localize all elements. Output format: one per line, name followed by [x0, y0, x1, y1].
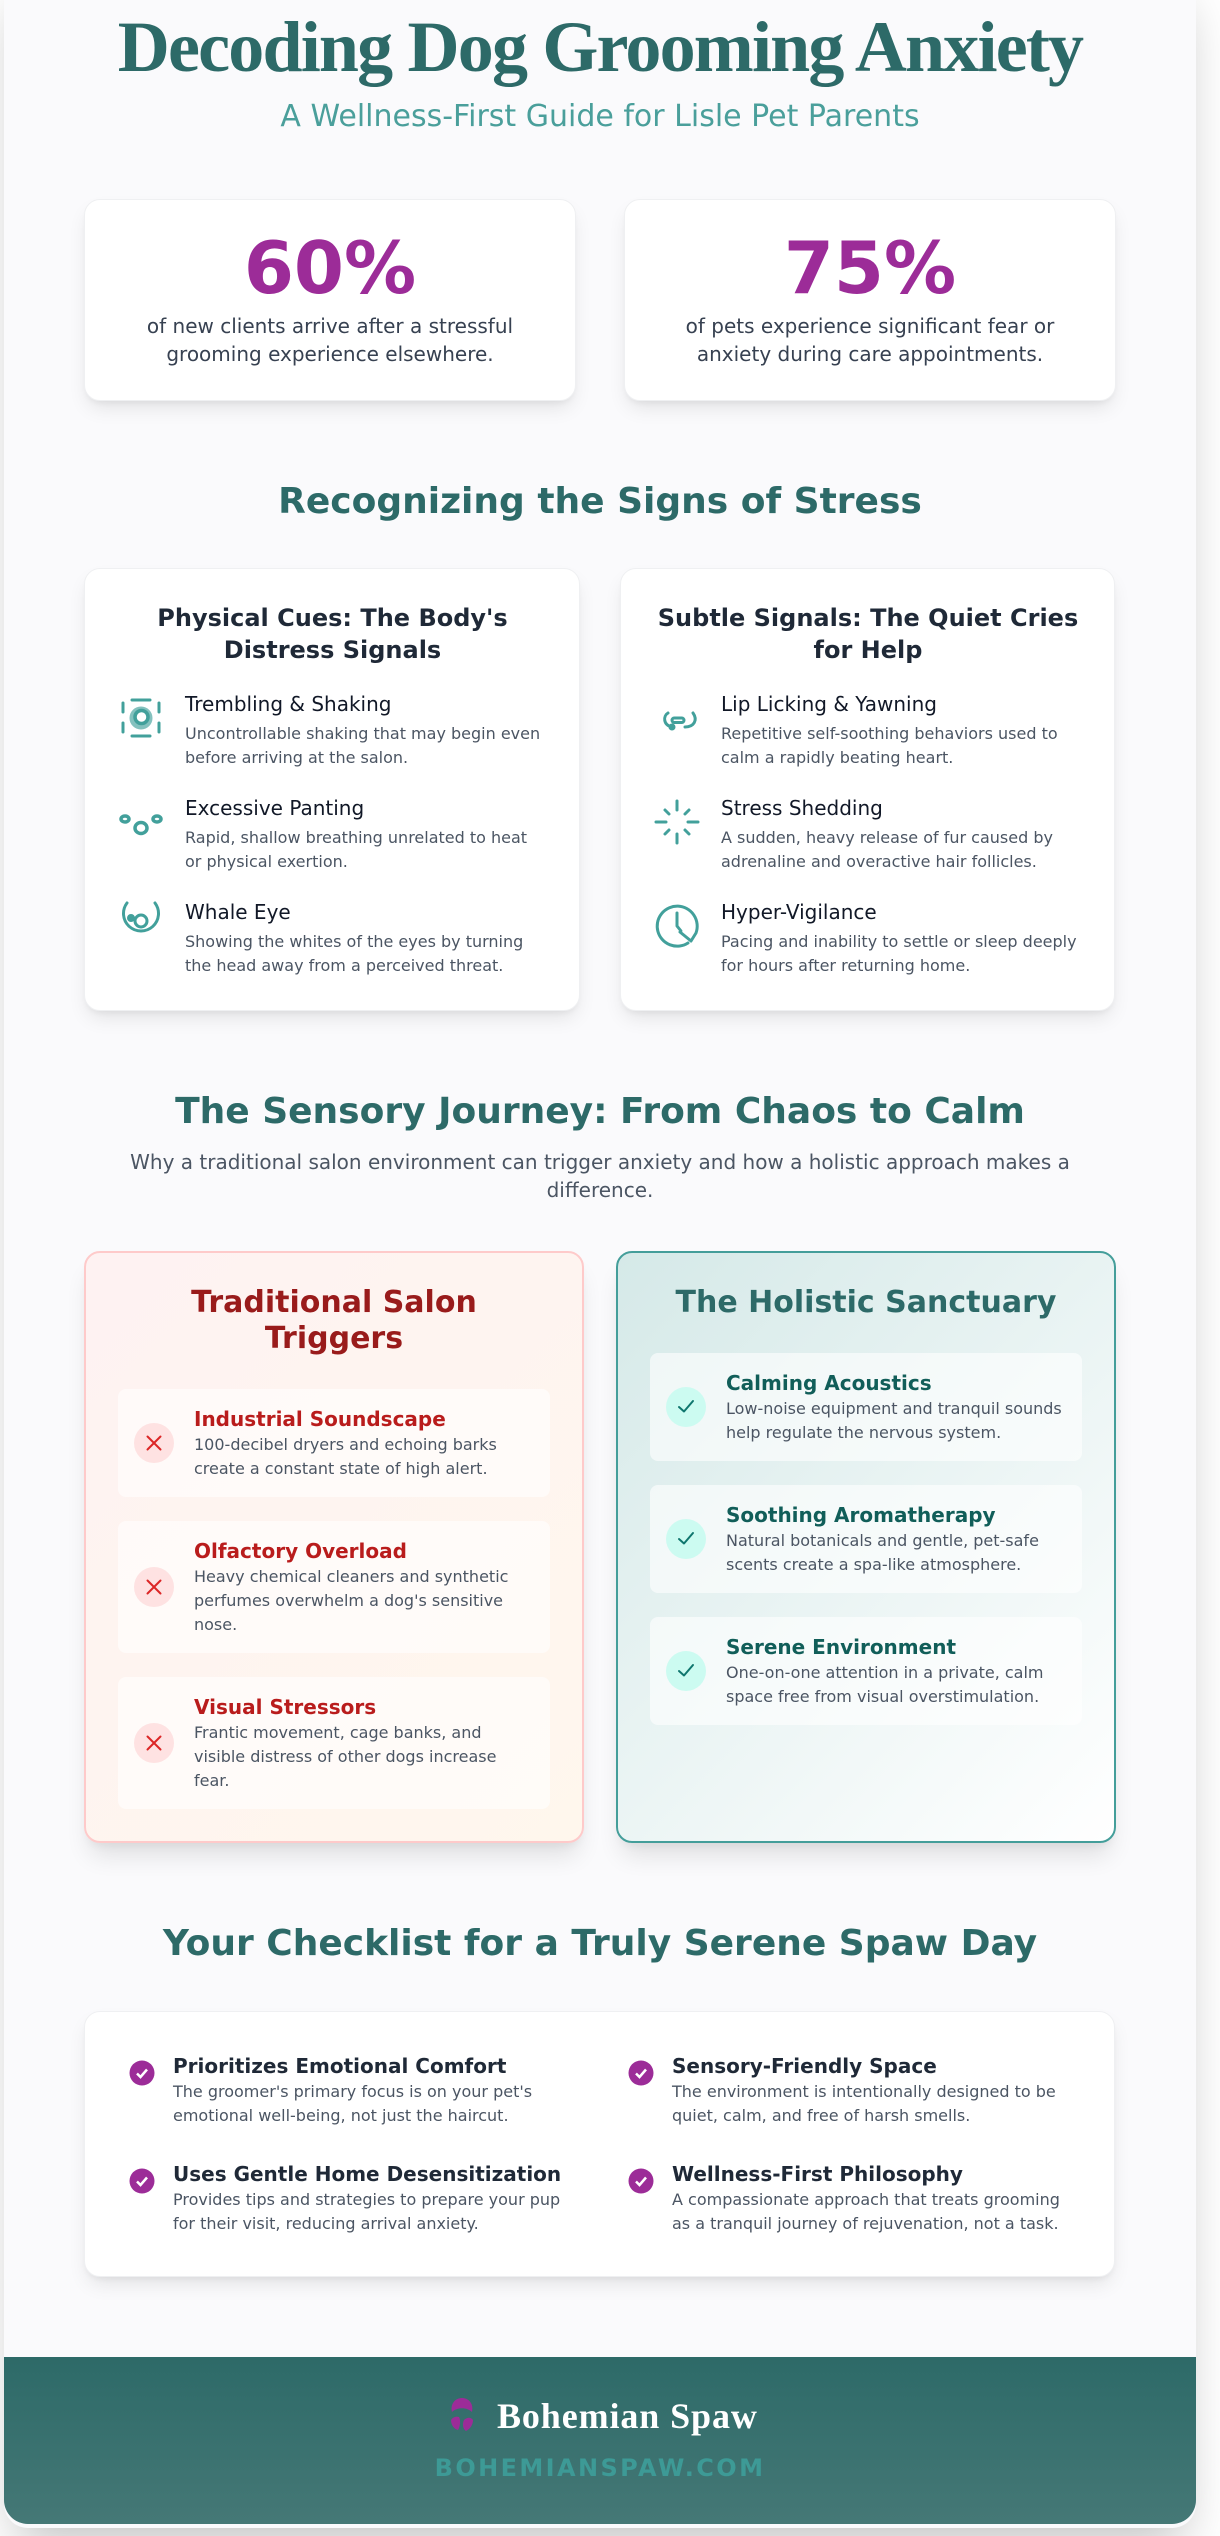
check text: Provides tips and strategies to prepare your pup — [173, 2190, 560, 2209]
check text: Sensory-Friendly Space — [672, 2054, 937, 2078]
icon: x — [134, 1723, 174, 1763]
item: stress shedding — [721, 796, 1053, 871]
trigger text: visible distress of other dogs increase — [194, 1747, 496, 1766]
check item: emotional comfort — [130, 2054, 532, 2125]
title: Decoding Dog Grooming Anxiety — [118, 7, 1082, 87]
stat text: of pets experience significant fear or — [686, 314, 1054, 338]
stat text: of new clients arrive after a stressful — [147, 314, 513, 338]
check text: quiet, calm, and free of harsh smells. — [672, 2106, 970, 2125]
section intro text: difference. — [547, 1178, 653, 1202]
check text — [672, 2162, 1060, 2233]
item: trembling: Uncontrollable shaking that may begin even — [185, 724, 540, 743]
icon: check — [666, 1519, 706, 1559]
heading: checklist: Your Checklist for a Truly Serene Spaw Day — [163, 1923, 1037, 1964]
icon: check — [666, 1387, 706, 1427]
check text: emotional well-being, not just the haircut. — [173, 2106, 509, 2125]
panel: checklist — [84, 2011, 1115, 2277]
check item: desensitization — [130, 2162, 561, 2233]
icon: x — [134, 1423, 174, 1463]
panel: subtle signals — [620, 568, 1115, 1011]
trigger text: Visual Stressors — [194, 1695, 376, 1719]
brand name: Bohemian Spaw — [497, 2396, 758, 2436]
trigger text: create a constant state of high alert. — [194, 1459, 488, 1478]
stat card: 60% — [84, 199, 576, 401]
item: stress shedding: adrenaline and overactive hair follicles. — [721, 852, 1037, 871]
item: lip licking: calm a rapidly beating heart. — [721, 748, 953, 767]
check text: as a tranquil journey of rejuvenation, not a task. — [672, 2214, 1059, 2233]
panel heading: subtle signals: for Help — [814, 636, 922, 664]
check text: Uses Gentle Home Desensitization — [173, 2162, 561, 2186]
item: hyper-vigilance: Pacing and inability to settle or sleep deeply — [721, 932, 1077, 951]
trigger text: Heavy chemical cleaners and synthetic — [194, 1567, 508, 1586]
section intro text — [130, 1150, 1070, 1202]
check text — [172, 2054, 532, 2125]
trigger text — [194, 1695, 496, 1790]
item: whale eye: Showing the whites of the eyes by turning — [185, 932, 523, 951]
item: trembling: Trembling & Shaking — [185, 692, 391, 716]
item: panting — [185, 796, 527, 871]
panel: traditional salon triggers — [84, 1251, 584, 1843]
website: BOHEMIANSPAW.COM — [435, 2454, 765, 2482]
benefit text: Calming Acoustics — [726, 1371, 932, 1395]
panel heading — [191, 1285, 477, 1356]
check text: for their visit, reducing arrival anxiety. — [173, 2214, 479, 2233]
panel heading: physical cues: Distress Signals — [224, 636, 441, 664]
benefit: calming acoustics — [650, 1353, 1082, 1461]
stat text — [686, 314, 1054, 366]
benefit: serene environment — [650, 1617, 1082, 1725]
check text: A compassionate approach that treats grooming — [672, 2190, 1060, 2209]
check item: sensory-friendly — [628, 2054, 1056, 2125]
trigger text: fear. — [194, 1771, 229, 1790]
heading: signs of stress: Recognizing the Signs of Stress — [278, 481, 922, 522]
trigger text: Olfactory Overload — [194, 1539, 407, 1563]
icon: purple check — [628, 2060, 654, 2086]
check item: wellness-first — [628, 2162, 1060, 2233]
benefit text: Low-noise equipment and tranquil sounds — [726, 1399, 1062, 1418]
item: whale eye — [185, 900, 523, 975]
icon: x — [134, 1567, 174, 1607]
stat card: 75% — [624, 199, 1116, 401]
benefit text: space free from visual overstimulation. — [726, 1687, 1039, 1706]
stat text — [147, 314, 513, 366]
check text — [672, 2054, 1056, 2125]
panel heading: physical cues: Physical Cues: The Body's — [157, 604, 508, 632]
panel: holistic sanctuary — [616, 1251, 1116, 1843]
item: panting: Excessive Panting — [185, 796, 364, 820]
benefit text — [726, 1635, 1044, 1706]
item: lip licking — [721, 692, 1058, 767]
check text: Wellness-First Philosophy — [672, 2162, 963, 2186]
benefit text — [726, 1503, 1039, 1574]
check text: Prioritizes Emotional Comfort — [173, 2054, 506, 2078]
item: stress shedding: A sudden, heavy release of fur caused by — [721, 828, 1053, 847]
item: stress shedding: Stress Shedding — [721, 796, 883, 820]
stat number: 60% — [244, 226, 416, 310]
trigger text — [194, 1407, 497, 1478]
item: hyper-vigilance — [721, 900, 1077, 975]
panel heading: Traditional Salon — [191, 1285, 477, 1320]
item: whale eye: the head away from a perceived threat. — [185, 956, 503, 975]
trigger text: 100-decibel dryers and echoing barks — [194, 1435, 497, 1454]
benefit: soothing aromatherapy — [650, 1485, 1082, 1593]
footer — [4, 2357, 1196, 2524]
panel heading: subtle signals: Subtle Signals: The Quiet Cries — [658, 604, 1078, 632]
panel heading: Triggers — [265, 1321, 403, 1356]
trigger text: Frantic movement, cage banks, and — [194, 1723, 482, 1742]
item: whale eye: Whale Eye — [185, 900, 291, 924]
benefit text: scents create a spa-like atmosphere. — [726, 1555, 1021, 1574]
heading: sensory journey: The Sensory Journey: From Chaos to Calm — [175, 1091, 1025, 1132]
panel heading: physical cues — [157, 604, 508, 664]
stat number: 75% — [784, 226, 956, 310]
trigger text — [194, 1539, 508, 1634]
check text — [173, 2162, 561, 2233]
stat text: anxiety during care appointments. — [697, 342, 1043, 366]
stat text: grooming experience elsewhere. — [166, 342, 494, 366]
check text: The environment is intentionally designed to be — [672, 2082, 1056, 2101]
check text: The groomer's primary focus is on your pet's — [173, 2082, 532, 2101]
item: panting: or physical exertion. — [185, 852, 348, 871]
icon: purple check — [130, 2060, 154, 2086]
icon: purple check — [130, 2168, 154, 2194]
item: panting: Rapid, shallow breathing unrelated to heat — [185, 828, 527, 847]
panel: physical cues — [84, 568, 580, 1011]
item: lip licking: Repetitive self-soothing behaviors used to — [721, 724, 1058, 743]
item: trembling — [184, 692, 540, 767]
panel heading: The Holistic Sanctuary — [676, 1285, 1056, 1320]
trigger: industrial soundscape — [118, 1389, 550, 1497]
trigger text: perfumes overwhelm a dog's sensitive — [194, 1591, 503, 1610]
benefit text: Soothing Aromatherapy — [726, 1503, 996, 1527]
trigger text: nose. — [194, 1615, 237, 1634]
benefit text: Serene Environment — [726, 1635, 956, 1659]
icon: logo paw — [451, 2398, 473, 2431]
benefit text: help regulate the nervous system. — [726, 1423, 1001, 1442]
trigger text: Industrial Soundscape — [194, 1407, 446, 1431]
item: trembling: before arriving at the salon. — [185, 748, 408, 767]
trigger: visual stressors — [118, 1677, 550, 1809]
subtitle: A Wellness-First Guide for Lisle Pet Parents — [280, 99, 920, 134]
item: hyper-vigilance: for hours after returning home. — [721, 956, 970, 975]
benefit text — [726, 1371, 1062, 1442]
item: lip licking: Lip Licking & Yawning — [721, 692, 937, 716]
trigger: olfactory overload — [118, 1521, 550, 1653]
panel heading: subtle signals — [658, 604, 1078, 664]
section intro text: Why a traditional salon environment can trigger anxiety and how a holistic approach makes a — [130, 1150, 1070, 1174]
benefit text: One-on-one attention in a private, calm — [726, 1663, 1044, 1682]
item: hyper-vigilance: Hyper-Vigilance — [721, 900, 877, 924]
icon: purple check — [628, 2168, 654, 2194]
benefit text: Natural botanicals and gentle, pet-safe — [726, 1531, 1039, 1550]
icon: check — [666, 1651, 706, 1691]
